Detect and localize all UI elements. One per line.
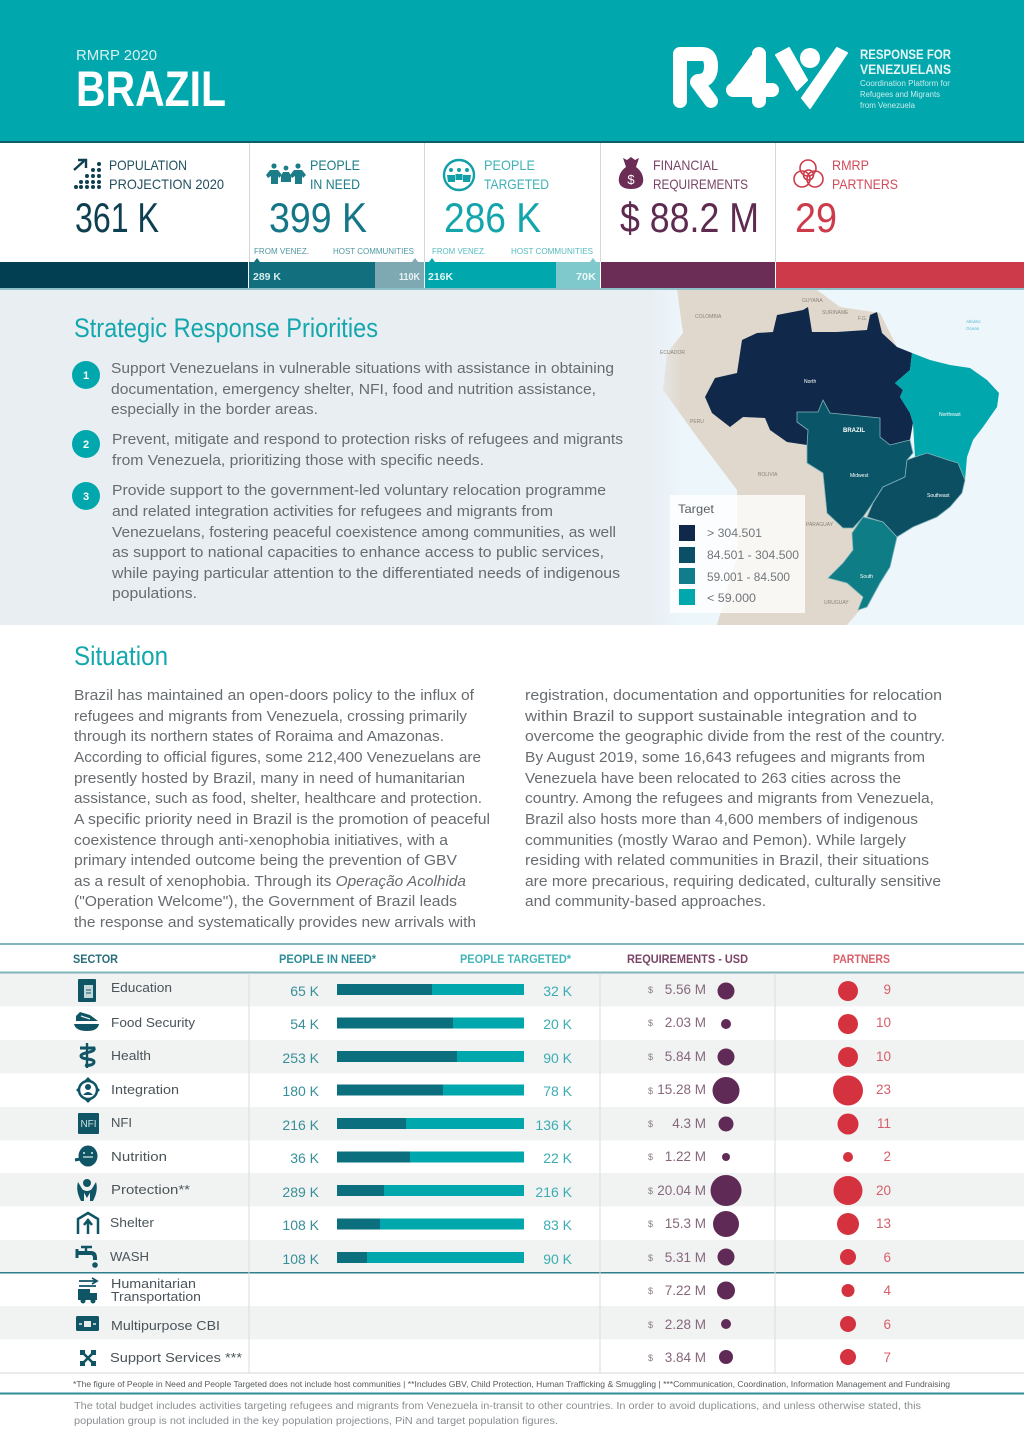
requirements values and bubbles: $ (648, 1286, 653, 1296)
row: NFI (78, 1113, 132, 1134)
stat: RMRP partners: PARTNERS (832, 176, 898, 192)
partners values and bubbles: 4 (883, 1283, 891, 1298)
partners values and bubbles: 6 (883, 1317, 891, 1332)
heading: strategic response priorities: Strategic Response Priorities (74, 313, 378, 343)
stat: financial requirements (619, 157, 759, 241)
situation text column 2: overcome the geographic divide from the rest of the country. (525, 729, 945, 745)
priority 1: Support Venezuelans in vulnerable situations with assistance in obtaining (111, 361, 614, 377)
people in need values: 108 K (282, 1217, 320, 1233)
map legend: 59.001 - 84.500 (707, 570, 790, 584)
requirements values and bubbles: $ (648, 1086, 653, 1096)
table header: PEOPLE TARGETED* (460, 954, 571, 966)
situation text column 1 (74, 688, 490, 931)
row: shelter: Shelter (110, 1215, 155, 1230)
logo: R4V (680, 46, 951, 110)
region: Northeast (895, 353, 999, 480)
situation text column 2: residing with related communities in Brazil, their situations (525, 853, 929, 869)
partners values and bubbles: 13 (876, 1216, 891, 1231)
stat: people in need (266, 157, 367, 241)
footnote: *The figure of People in Need and People Targeted does not include host communities | **Includes GBV, Child Protection, Human Trafficking & Smuggling | ***Communication, Coordination, Information Management and Fundraising (73, 1379, 950, 1389)
table header: REQUIREMENTS - USD (627, 954, 748, 966)
colour bars with population split: HOST COMMUNITIES (511, 246, 593, 256)
row: support services (80, 1350, 242, 1366)
priority 1: especially in the border areas. (111, 402, 318, 418)
row: food security (74, 1012, 196, 1031)
requirements values and bubbles: 4.3 M (672, 1116, 706, 1131)
logo: R4V: from Venezuela (860, 101, 916, 110)
row: education: Education (111, 980, 172, 995)
logo: R4V: Refugees and Migrants (860, 90, 940, 99)
partners values and bubbles (833, 981, 891, 1365)
stat: population projection: 361 K (75, 194, 159, 241)
map labels: Atlantic (966, 319, 982, 324)
situation text column 2: Venezuela have been relocated to 263 cities across the (525, 771, 901, 787)
stat: people in need: IN NEED (310, 176, 360, 192)
stat: RMRP partners: RMRP (832, 157, 869, 173)
stat: population projection (74, 157, 224, 241)
priority 2: 2 (83, 439, 89, 451)
budget note: The total budget includes activities targeting refugees and migrants from Venezuela in-transit to other countries. In order to avoid duplications, and unless otherwise stated, this (74, 1400, 921, 1412)
requirements values and bubbles: $ (648, 1152, 653, 1162)
requirements values and bubbles: $ (648, 1219, 653, 1229)
situation text column 2 (524, 688, 945, 910)
priority 1 (72, 361, 614, 418)
people in need values: 289 K (282, 1184, 320, 1200)
map labels: ECUADOR (660, 350, 685, 356)
stat: people targeted: 286 K (444, 194, 541, 241)
people targeted values (535, 983, 573, 1267)
row: multipurpose CBI: Multipurpose CBI (111, 1318, 220, 1333)
priority 2: Prevent, mitigate and respond to protection risks of refugees and migrants (112, 432, 623, 448)
map legend (670, 495, 805, 613)
map labels: South (860, 574, 873, 580)
icon: people group (266, 163, 306, 184)
requirements values and bubbles: 2.03 M (665, 1015, 706, 1030)
partners values and bubbles: 7 (883, 1350, 891, 1365)
logo: R4V: RESPONSE FOR (860, 46, 951, 62)
map labels: Midwest (850, 473, 869, 479)
priority 3: while paying particular attention to the differentiated needs of indigenous (111, 566, 620, 582)
situation text column 1: coexistence through anti-xenophobia initiatives, with a (74, 833, 449, 849)
partners values and bubbles: 23 (876, 1082, 891, 1097)
priority 1: 1 (83, 370, 89, 382)
people targeted values: 136 K (535, 1117, 573, 1133)
title: RMRP 2020 Brazil: BRAZIL (76, 61, 226, 117)
people in need values (282, 983, 320, 1267)
colour bars with population split: FROM VENEZ. (254, 246, 309, 256)
people in need values: 108 K (282, 1251, 320, 1267)
key figures strip (0, 143, 1024, 290)
people in need values: 216 K (282, 1117, 320, 1133)
row: multipurpose CBI (76, 1316, 220, 1333)
requirements values and bubbles: $ (648, 1186, 653, 1196)
map labels: F.G. (858, 316, 867, 322)
logo: R4V: Coordination Platform for (860, 79, 950, 88)
panel: situation (74, 641, 945, 931)
requirements values and bubbles: $ (648, 1253, 653, 1263)
row: nutrition: Nutrition (111, 1149, 167, 1164)
requirements values and bubbles: 5.56 M (665, 982, 706, 997)
partners values and bubbles: 11 (877, 1116, 891, 1131)
row: humanitarian transportation: Humanitarian (111, 1276, 196, 1291)
requirements values and bubbles: $ (648, 985, 653, 995)
people in need values: 65 K (290, 983, 320, 999)
partners values and bubbles: 6 (883, 1250, 891, 1265)
requirements values and bubbles: 5.31 M (665, 1250, 706, 1265)
map legend: > 304.501 (707, 526, 762, 540)
map labels: Southeast (927, 493, 950, 499)
header banner (0, 0, 1024, 143)
colour bars with population split: HOST COMMUNITIES (333, 246, 414, 256)
requirements values and bubbles: 20.04 M (657, 1183, 706, 1198)
row: health: Health (111, 1048, 151, 1063)
table header (73, 954, 890, 966)
situation text column 2: are more precarious, requiring dedicated, culturally sensitive (525, 874, 941, 890)
requirements values and bubbles: 5.84 M (665, 1049, 706, 1064)
stat: financial requirements: REQUIREMENTS (653, 176, 748, 192)
stat: people targeted (444, 157, 549, 241)
map labels: North (804, 379, 816, 385)
people in need values: 36 K (290, 1150, 320, 1166)
map legend: 84.501 - 304.500 (707, 548, 799, 562)
table header: PEOPLE IN NEED* (279, 954, 377, 966)
icon: people in circle (444, 160, 474, 190)
requirements values and bubbles: $ (648, 1353, 653, 1363)
requirements values and bubbles (648, 982, 742, 1365)
budget note: population group is not included in the key population projections, PiN and target population figures. (74, 1415, 558, 1427)
colour bars with population split: 216K (428, 272, 454, 283)
situation text column 1: ("Operation Welcome"), the Government of Brazil leads (74, 894, 457, 910)
situation text column 2: communities (mostly Warao and Pemon). While largely (525, 833, 907, 849)
situation text column 2: country. Among the refugees and migrants from Venezuela, (525, 791, 934, 807)
people in need values: 54 K (290, 1016, 320, 1032)
priority 3: populations. (112, 586, 197, 602)
situation text column 2: and community-based approaches. (525, 894, 766, 910)
people targeted values: 20 K (543, 1016, 573, 1032)
partners values and bubbles: 20 (876, 1183, 891, 1198)
map labels: BOLIVIA (758, 472, 778, 478)
priority 2: from Venezuela, prioritizing those with specific needs. (112, 453, 484, 469)
situation text column 1: through its northern states of Roraima and Amazonas. (74, 729, 444, 745)
logo: R4V: VENEZUELANS (860, 61, 951, 77)
partners values and bubbles: 10 (876, 1015, 891, 1030)
partners values and bubbles: 2 (883, 1149, 891, 1164)
region: South (828, 517, 897, 610)
row: humanitarian transportation: Transportation (111, 1289, 201, 1304)
people targeted values: 83 K (543, 1217, 573, 1233)
row: integration: Integration (111, 1082, 179, 1097)
heading: situation: Situation (74, 641, 168, 671)
row: protection: Protection** (111, 1182, 190, 1197)
situation text column 1: A specific priority need in Brazil is the promotion of peaceful (74, 812, 490, 828)
colour bars with population split: 110K (399, 272, 421, 283)
people targeted values: 216 K (535, 1184, 573, 1200)
partners values and bubbles: 9 (883, 982, 891, 997)
situation text column 1: Brazil has maintained an open-doors policy to the influx of (74, 688, 475, 704)
situation text column 2: Brazil also hosts more than 4,600 members of indigenous (525, 812, 918, 828)
stat: people targeted: TARGETED (484, 176, 549, 192)
map legend: Target (678, 502, 715, 516)
row: food security: Food Security (111, 1015, 196, 1030)
map labels: GUYANA (802, 298, 823, 304)
situation text column 2: registration, documentation and opportunities for relocation (525, 688, 942, 704)
row: WASH (77, 1247, 149, 1268)
title: RMRP 2020 Brazil (76, 47, 226, 117)
situation text column 1: According to official figures, some 212,400 Venezuelans are (74, 750, 481, 766)
people in need values: 180 K (282, 1083, 320, 1099)
title: RMRP 2020 Brazil: RMRP 2020 (76, 47, 157, 64)
colour bars with population split: 70K (576, 272, 597, 283)
stat: people in need: PEOPLE (310, 157, 360, 173)
sector names and icons (74, 979, 242, 1366)
row: WASH: WASH (110, 1249, 149, 1264)
situation text column 1: as a result of xenophobia. Through its Operação Acolhida (74, 874, 466, 890)
requirements values and bubbles: $ (648, 1052, 653, 1062)
stat: financial requirements: FINANCIAL (653, 157, 718, 173)
colour bars with population split: 289 K (253, 272, 282, 283)
map labels: BRAZIL (843, 428, 865, 434)
icon: money bag (619, 157, 643, 189)
requirements values and bubbles: 1.22 M (665, 1149, 706, 1164)
people targeted values: 32 K (543, 983, 573, 999)
priority 3: Venezuelans, fostering peaceful coexistence among communities, as well (112, 525, 616, 541)
icon: interlocking rings (794, 160, 823, 187)
table header: PARTNERS (833, 954, 890, 966)
stat: financial requirements: $ 88.2 M (620, 194, 759, 241)
people targeted values: 78 K (543, 1083, 573, 1099)
row: NFI: NFI (80, 1119, 97, 1130)
map labels: Ocean (966, 326, 980, 331)
need versus targeted bars (337, 984, 524, 1263)
row: support services: Support Services *** (110, 1350, 242, 1365)
map legend: < 59.000 (707, 591, 756, 605)
stat: RMRP partners: 29 (795, 194, 837, 241)
priority 3: and related integration activities for refugees and migrants from (112, 504, 553, 520)
situation text column 2: within Brazil to support sustainable integration and to (524, 709, 917, 725)
people targeted values: 90 K (543, 1251, 573, 1267)
requirements values and bubbles: $ (648, 1018, 653, 1028)
situation text column 2: By August 2019, some 16,643 refugees and migrants from (525, 750, 925, 766)
stat: population projection: POPULATION (109, 157, 187, 173)
situation text column 1: primary intended outcome being the prevention of GBV (74, 853, 457, 869)
map labels: COLOMBIA (695, 314, 722, 320)
requirements values and bubbles: 3.84 M (665, 1350, 706, 1365)
row: health (80, 1043, 151, 1068)
region: Southeast (867, 453, 965, 537)
priority 1: documentation, emergency shelter, NFI, food and nutrition assistance, (111, 382, 596, 398)
icon: money bag: $ (627, 172, 635, 187)
row: protection (77, 1179, 190, 1201)
people targeted values: 22 K (543, 1150, 573, 1166)
panel: sector table (0, 943, 1024, 1394)
stat: people targeted: PEOPLE (484, 157, 535, 173)
row: humanitarian transportation (78, 1276, 201, 1304)
situation text column 1: refugees and migrants from Venezuela, crossing primarily (74, 709, 468, 725)
table row stripes (0, 973, 1024, 1339)
priority 3: 3 (83, 491, 89, 503)
row: education (78, 979, 172, 1002)
map labels: PERU (690, 419, 704, 425)
people in need values: 253 K (282, 1050, 320, 1066)
budget note (74, 1400, 921, 1427)
stat: people in need: 399 K (269, 194, 367, 241)
requirements values and bubbles: $ (648, 1320, 653, 1330)
region: North (705, 307, 913, 445)
stat: RMRP partners (794, 157, 898, 241)
map labels (660, 298, 982, 606)
row: nutrition (75, 1146, 167, 1166)
region: Center-West (797, 400, 913, 528)
requirements values and bubbles: 15.28 M (657, 1082, 706, 1097)
priority 3: as support to national capacities to enhance access to public services, (112, 545, 604, 561)
panel: strategic response priorities (0, 290, 1024, 625)
row: integration (76, 1077, 179, 1103)
icon: population growth (74, 160, 101, 189)
requirements values and bubbles: 2.28 M (665, 1317, 706, 1332)
priority 3 (72, 482, 620, 602)
requirements values and bubbles: 15.3 M (665, 1216, 706, 1231)
map labels: SURINAME (822, 310, 849, 316)
row: NFI: NFI (111, 1115, 132, 1130)
map labels: PARAGUAY (806, 522, 834, 528)
situation text column 1: the response and systematically provides new arrivals with (74, 915, 476, 931)
priority 2 (72, 430, 623, 469)
stat: population projection: PROJECTION 2020 (109, 176, 224, 192)
table header: SECTOR (73, 954, 119, 966)
priority 3: Provide support to the government-led voluntary relocation programme (112, 483, 606, 499)
people targeted values: 90 K (543, 1050, 573, 1066)
colour bars with population split: FROM VENEZ. (432, 246, 486, 256)
partners values and bubbles: 10 (876, 1049, 891, 1064)
colour bars with population split (0, 246, 1024, 290)
requirements values and bubbles: $ (648, 1119, 653, 1129)
map labels: Northeast (939, 412, 961, 418)
row: shelter (78, 1213, 155, 1234)
map of Brazil (650, 290, 1024, 625)
map labels: URUGUAY (824, 600, 849, 606)
situation text column 1: assistance, such as food, shelter, healthcare and protection. (74, 791, 482, 807)
requirements values and bubbles: 7.22 M (665, 1283, 706, 1298)
situation text column 1: presently hosted by Brazil, many in need of humanitarian (74, 771, 465, 787)
